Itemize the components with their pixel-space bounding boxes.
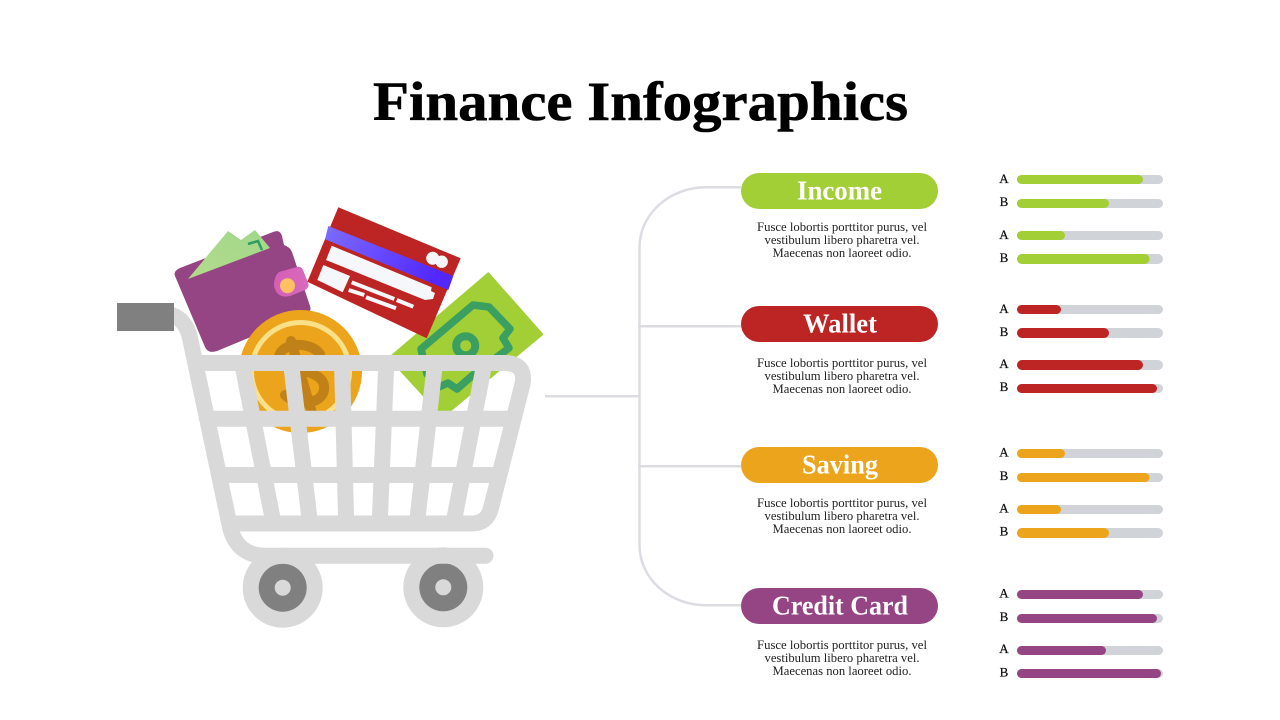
text block: wallet: Maecenas non laoreet odio. [772,381,912,396]
panel: saving [741,445,1163,539]
pill: wallet [741,306,938,342]
bar chart: wallet: A [999,356,1009,371]
bar chart: income: B [1000,194,1009,209]
text block: income: Maecenas non laoreet odio. [772,245,912,260]
bar chart: saving: A [999,445,1009,460]
panel: income [741,171,1163,265]
panel: wallet [741,301,1163,396]
text block: saving [757,495,927,536]
bar chart: income [999,171,1163,265]
text block: credit card: Maecenas non laoreet odio. [772,663,912,678]
bar chart: credit card: A [999,586,1009,601]
wallet clasp [274,267,309,297]
bar chart: saving: A [999,501,1009,516]
bar chart: wallet: B [1000,324,1009,339]
text block: wallet: vestibulum libero pharetra vel. [764,368,920,383]
text block: saving: Maecenas non laoreet odio. [772,521,912,536]
icon: credit card [307,207,461,338]
text block: income: Fusce lobortis porttitor purus, vel [757,219,927,234]
text block: income: vestibulum libero pharetra vel. [764,232,920,247]
bar chart: credit card [999,586,1163,680]
icon: wallet [175,230,310,352]
pill: income: Income [797,175,882,205]
cart handle grip [117,303,174,331]
pill: saving [741,447,938,483]
cart wheels [243,547,483,628]
pill: credit card: Credit Card [772,590,908,620]
bar chart: credit card: B [1000,665,1009,680]
text block: saving: vestibulum libero pharetra vel. [764,508,920,523]
text block: income [757,219,927,260]
bar chart: income: A [999,227,1009,242]
bar chart: income: B [1000,250,1009,265]
pill: wallet: Wallet [803,309,877,339]
bar chart: wallet [999,301,1163,394]
panel: credit card [741,586,1163,680]
pill: saving: Saving [802,449,878,479]
pill: income [741,173,938,209]
bar chart: wallet: B [1000,379,1009,394]
illustration: shopping cart with finance items [117,207,542,628]
bar chart: credit card: A [999,641,1009,656]
text block: credit card: vestibulum libero pharetra vel. [764,650,920,665]
bar chart: saving [999,445,1163,539]
text block: wallet: Fusce lobortis porttitor purus, vel [757,355,927,370]
icon: gold coin [239,310,362,433]
title: Finance Infographics [373,71,908,132]
bar chart: wallet: A [999,301,1009,316]
text block: credit card [757,637,927,678]
pill: credit card [741,588,938,624]
icon: green banknote [390,274,542,416]
bar chart: saving: B [1000,524,1009,539]
text block: saving: Fusce lobortis porttitor purus, vel [757,495,927,510]
text block: wallet [757,355,927,396]
bar chart: credit card: B [1000,609,1009,624]
connector lines [545,187,741,605]
icon: cart frame [172,315,523,628]
bar chart: income: A [999,171,1009,186]
bar chart: saving: B [1000,468,1009,483]
text block: credit card: Fusce lobortis porttitor purus, vel [757,637,927,652]
banknotes in wallet [188,230,270,279]
